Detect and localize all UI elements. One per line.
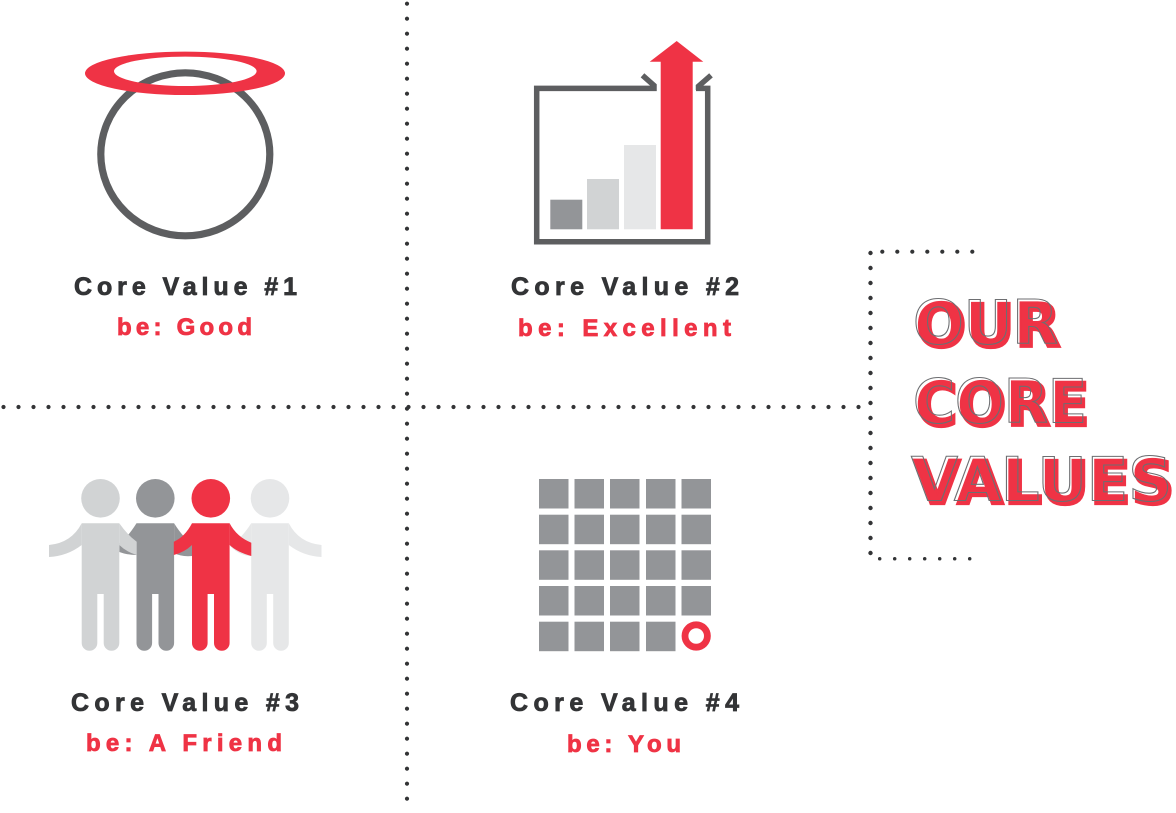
sublabel: be good: be: Good [117, 314, 252, 341]
sublabel: be excellent: be: Excellent [518, 315, 731, 342]
icon: four people linked arm in arm [49, 479, 322, 651]
person 2 [119, 479, 192, 651]
person 3 [174, 479, 251, 651]
title: our core values: VALUES [914, 448, 1175, 519]
sublabel: be a friend: be: A Friend [86, 730, 282, 757]
title: our core values: OUR [913, 288, 1058, 358]
icon: bar chart with breakout arrow [537, 41, 711, 242]
label: core value 4: Core Value #4 [510, 689, 739, 717]
sublabel: be you: be: You [567, 731, 681, 758]
title: our core values: CORE [916, 370, 1090, 441]
icon: grid of squares with one red ring [539, 479, 711, 651]
dotted bracket framing the title [870, 252, 974, 559]
title: our core values: OUR [916, 291, 1061, 362]
label: core value 1: Core Value #1 [74, 273, 297, 301]
label: core value 2: Core Value #2 [511, 273, 739, 301]
title: our core values: CORE [913, 366, 1087, 438]
title: our core values: VALUES [911, 444, 1172, 516]
label: core value 3: Core Value #3 [71, 689, 299, 717]
person 4 [230, 479, 322, 651]
icon: circle with halo [85, 52, 285, 236]
person 1 [49, 479, 137, 651]
title: our core values [911, 288, 1175, 519]
